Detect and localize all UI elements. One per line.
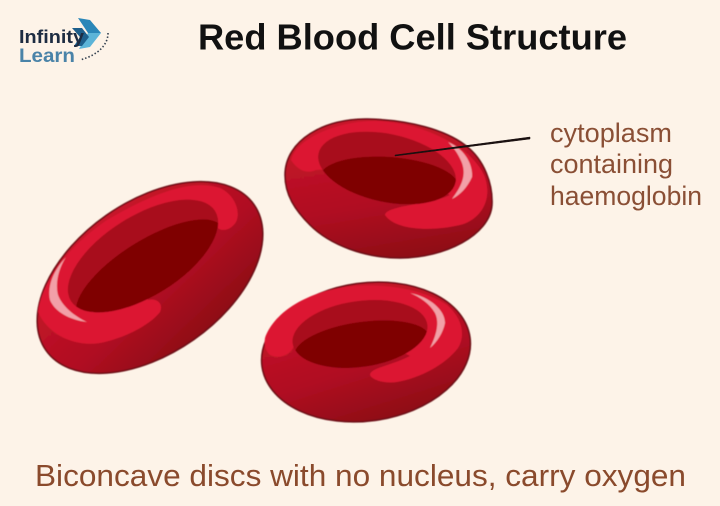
title: Red Blood Cell Structure [198, 16, 627, 58]
logo chevron icon [72, 18, 108, 60]
logo: Infinity Learn [19, 18, 108, 67]
label: cytoplasm containing haemoglobin: cytoplasm [550, 118, 672, 148]
logo wordmark: Infinity [19, 27, 84, 47]
leader line: cytoplasm [395, 137, 530, 156]
label: cytoplasm containing haemoglobin [550, 118, 702, 211]
label: cytoplasm containing haemoglobin: containing [550, 149, 673, 179]
label: cytoplasm containing haemoglobin: haemoglobin [550, 181, 702, 211]
red blood cell: left [36, 180, 264, 375]
red blood cell: top right [285, 119, 492, 258]
caption: Biconcave discs with no nucleus, carry oxygen [35, 458, 686, 493]
logo: Infinity Learn: Learn [19, 45, 75, 67]
red blood cell: bottom [260, 280, 472, 424]
